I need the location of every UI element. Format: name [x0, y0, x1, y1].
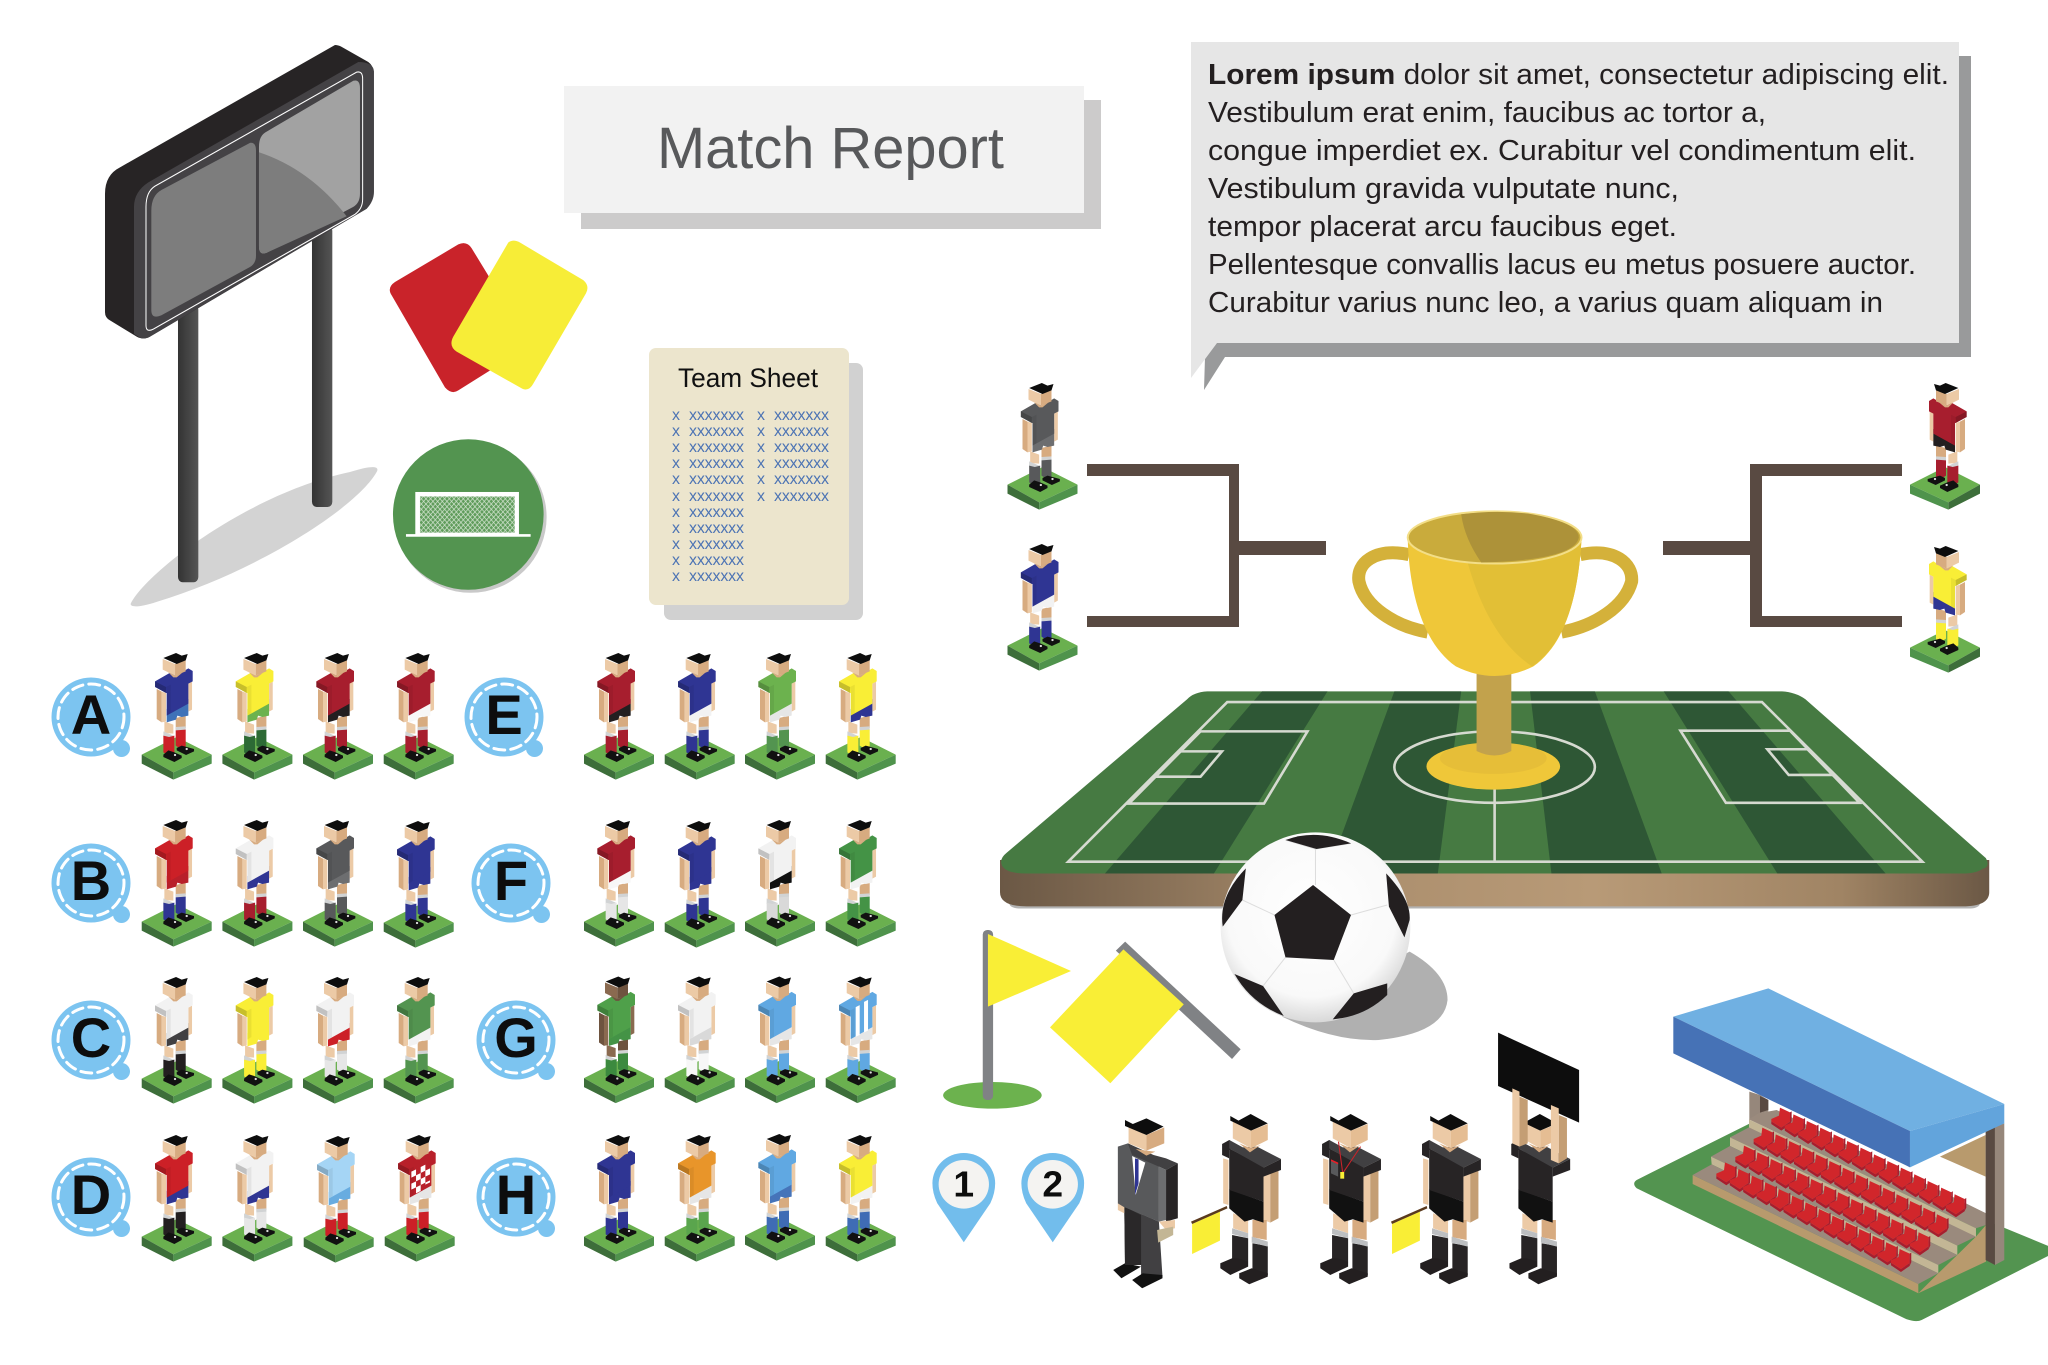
- group E players: [584, 653, 896, 780]
- text block: player list: xxxxxxx: [774, 488, 829, 505]
- text block: player list: x: [672, 407, 680, 424]
- seats: [1716, 1108, 1966, 1272]
- text block: player list: x: [672, 536, 680, 553]
- text block: player list: xxxxxxx: [774, 439, 829, 456]
- badge A: A: [71, 683, 111, 746]
- text block: player list: x: [672, 520, 680, 537]
- text block: player list: x: [672, 568, 680, 585]
- player: semi-final blue: [1008, 544, 1077, 671]
- badge D: [52, 1158, 130, 1237]
- text block: lorem ipsum: Vestibulum erat enim, faucibus ac tortor a,: [1208, 97, 1766, 129]
- text block: lorem ipsum: Curabitur varius nunc leo, a varius quam aliquam in: [1208, 287, 1883, 319]
- text block: player list: [672, 407, 829, 585]
- badge B: [52, 844, 130, 923]
- text block: player list: xxxxxxx: [689, 488, 744, 505]
- text block: player list: xxxxxxx: [774, 407, 829, 424]
- badge G: G: [494, 1006, 538, 1069]
- official: fourth official with board: [1498, 1033, 1579, 1284]
- text block: player list: x: [757, 471, 765, 488]
- text block: lorem ipsum: congue imperdiet ex. Curabitur vel condimentum elit.: [1208, 135, 1916, 167]
- player: semi-final red: [1910, 383, 1980, 510]
- text block: player list: x: [672, 471, 680, 488]
- officials group: [1113, 1033, 1579, 1288]
- text block: lorem ipsum: Vestibulum gravida vulputate nunc,: [1208, 173, 1679, 205]
- text block: player list: x: [757, 407, 765, 424]
- text block: player list: xxxxxxx: [689, 520, 744, 537]
- panel: speech bubble: [1191, 42, 1971, 390]
- text block: player list: xxxxxxx: [689, 471, 744, 488]
- text block: player list: xxxxxxx: [689, 455, 744, 472]
- panel: pitch: [1000, 691, 1989, 909]
- badge E: [464, 678, 544, 757]
- text block: player list: xxxxxxx: [689, 552, 744, 569]
- group C players: [142, 977, 454, 1104]
- badge C: [52, 1000, 130, 1080]
- player: semi-final yellow: [1910, 546, 1980, 673]
- text block: player list: x: [757, 439, 765, 456]
- group G players: [584, 976, 896, 1103]
- bracket: right: [1663, 464, 1902, 627]
- icon: scoreboard: [105, 45, 377, 606]
- icon: corner flag: [943, 930, 1071, 1109]
- official: manager in suit: [1113, 1118, 1178, 1288]
- icon: linesman flag: [1050, 942, 1241, 1083]
- group F players: [584, 820, 896, 948]
- bracket: left: [1087, 464, 1326, 627]
- text block: player list: x: [672, 455, 680, 472]
- icon: map pin 1: 1: [953, 1164, 974, 1204]
- text block: player list: xxxxxxx: [689, 407, 744, 424]
- heading: team sheet: Team Sheet: [678, 363, 818, 393]
- text block: player list: xxxxxxx: [689, 439, 744, 456]
- panel: title box: [564, 86, 1101, 229]
- badge G: [476, 1000, 556, 1080]
- icon: grandstand: [1634, 988, 2048, 1321]
- icon: goal badge: [393, 439, 547, 593]
- official: assistant referee with flag: [1191, 1114, 1281, 1284]
- official: second assistant referee with flag: [1391, 1114, 1481, 1284]
- group D players: [142, 1135, 455, 1263]
- text block: lorem ipsum: tempor placerat arcu faucibus eget.: [1208, 211, 1677, 243]
- badge H: [476, 1158, 556, 1237]
- badge A: [52, 678, 130, 757]
- text block: player list: x: [757, 423, 765, 440]
- panel: team sheet: [649, 348, 863, 620]
- text block: player list: xxxxxxx: [774, 455, 829, 472]
- roof: [1673, 988, 2004, 1167]
- group A players: [142, 653, 454, 780]
- group B players: [142, 820, 454, 948]
- badge F: [472, 844, 550, 923]
- icon: map pin 2: 2: [1042, 1164, 1063, 1204]
- badge H: H: [496, 1163, 536, 1226]
- icon: trophy: [1359, 511, 1632, 790]
- text block: lorem ipsum: Pellentesque convallis lacus eu metus posuere auctor.: [1208, 249, 1916, 281]
- text block: player list: xxxxxxx: [774, 471, 829, 488]
- text block: player list: xxxxxxx: [689, 504, 744, 521]
- icon: football: [1221, 832, 1448, 1040]
- text block: player list: x: [672, 439, 680, 456]
- text block: player list: xxxxxxx: [689, 423, 744, 440]
- text block: player list: x: [672, 423, 680, 440]
- icon: map pin 1: [932, 1153, 995, 1242]
- text block: player list: x: [757, 455, 765, 472]
- text block: lorem ipsum: [1208, 59, 1949, 319]
- badge F: F: [494, 849, 528, 912]
- title: Match Report: [657, 116, 1004, 181]
- badge B: B: [71, 849, 111, 912]
- text block: player list: x: [672, 552, 680, 569]
- icon: map pin 2: [1021, 1153, 1084, 1242]
- badge C: C: [71, 1006, 111, 1069]
- text block: lorem ipsum: Lorem ipsum dolor sit amet, consectetur adipiscing elit.: [1208, 59, 1949, 91]
- text block: player list: x: [672, 504, 680, 521]
- text block: player list: xxxxxxx: [774, 423, 829, 440]
- text block: player list: xxxxxxx: [689, 536, 744, 553]
- player: semi-final grey: [1008, 383, 1077, 510]
- text block: player list: xxxxxxx: [689, 568, 744, 585]
- group H players: [584, 1134, 896, 1262]
- badge D: D: [71, 1163, 111, 1226]
- icon: red and yellow cards: [390, 241, 587, 392]
- badge E: E: [485, 683, 523, 746]
- official: referee with whistle: [1320, 1114, 1381, 1284]
- text block: player list: x: [757, 488, 765, 505]
- text block: player list: x: [672, 488, 680, 505]
